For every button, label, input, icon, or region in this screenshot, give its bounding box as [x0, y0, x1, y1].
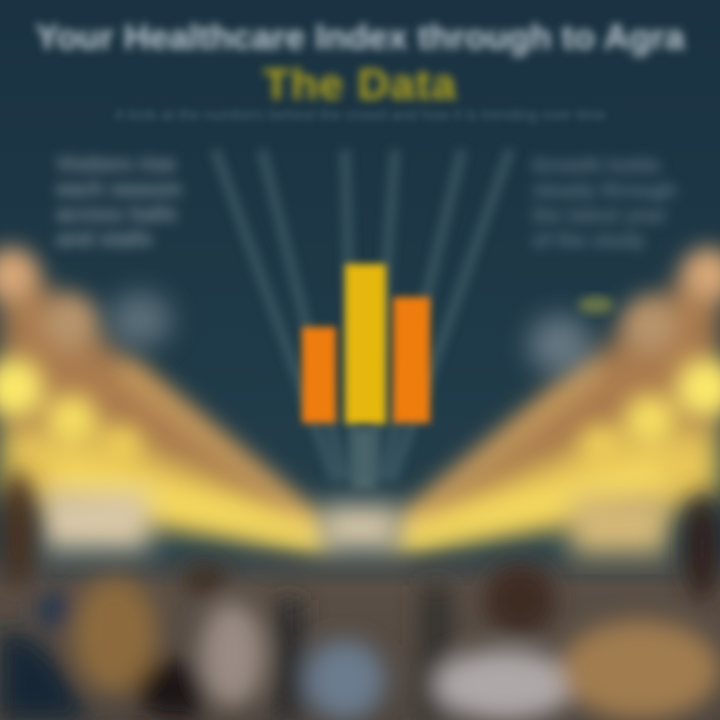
left ceiling band	[0, 250, 325, 550]
crowd figures	[0, 470, 720, 720]
text block: right note: the latest year	[532, 205, 667, 227]
ceiling lights	[0, 249, 720, 540]
text block: right note: of the study	[532, 230, 645, 252]
text block: left note: Visitors rise	[56, 153, 176, 176]
small yellow accent	[578, 296, 614, 314]
text block: left note: across halls	[56, 203, 177, 226]
text block: left note: and stalls	[56, 228, 153, 251]
text block: left note	[52, 152, 186, 252]
text block: right note	[530, 154, 678, 252]
text block: right note: Growth holds	[532, 155, 661, 177]
text block: right note: steady through	[532, 180, 676, 202]
text block: left note: each season	[56, 178, 182, 201]
crowd floor band	[0, 545, 720, 720]
hall glow patches	[40, 490, 670, 555]
right ceiling band	[395, 250, 720, 550]
stem beneath chart	[352, 428, 376, 488]
title: Your Healthcare Index through to Agra	[36, 17, 684, 57]
grey haze patches	[108, 292, 592, 375]
perspective rays	[215, 150, 510, 480]
description: A look at the numbers behind the crowd and how it is trending over time	[114, 107, 606, 124]
bar chart	[302, 264, 430, 424]
subtitle: The Data	[263, 60, 457, 109]
